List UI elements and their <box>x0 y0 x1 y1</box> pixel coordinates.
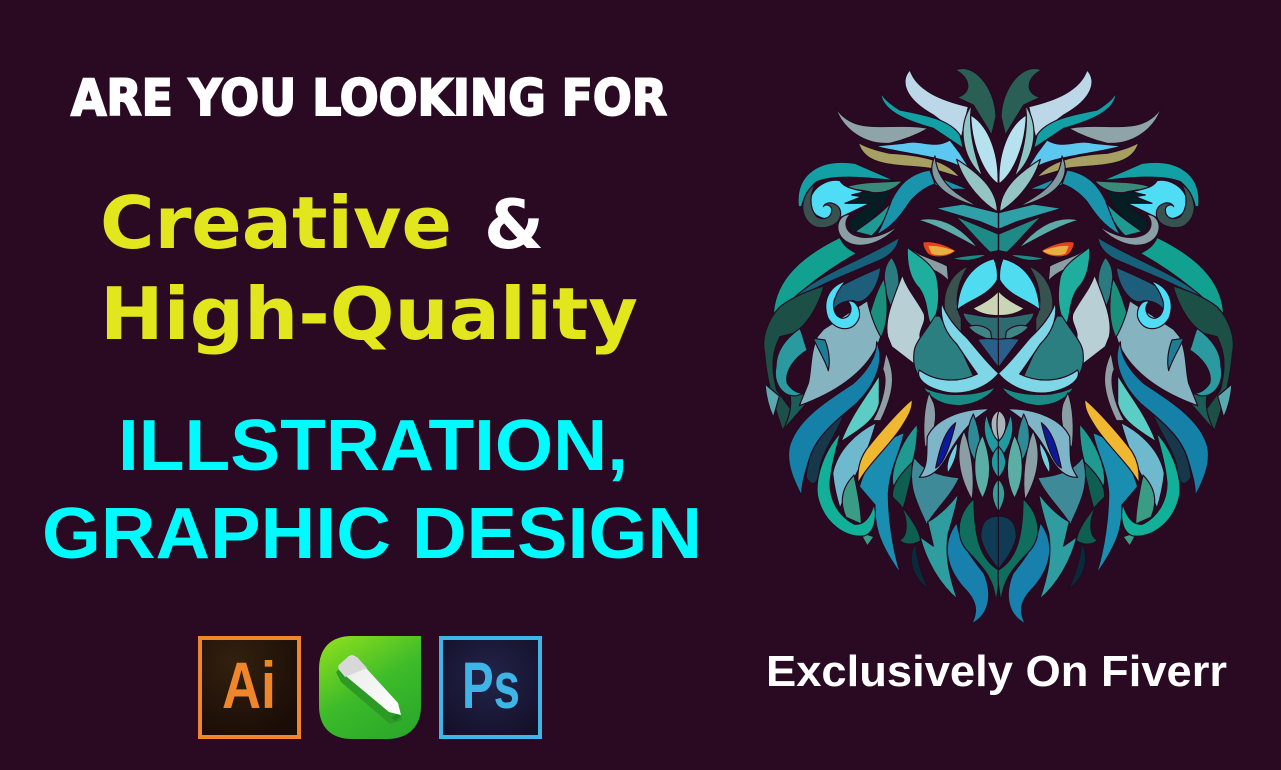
icon: adobe photoshop: Ps <box>462 648 520 722</box>
lion lower half <box>764 281 1000 624</box>
icon: coreldraw pen <box>319 636 421 739</box>
caption: exclusively on fiverr: Exclusively On Fiverr <box>766 647 1227 696</box>
lion left half <box>764 68 1000 624</box>
heading: are you looking for: ARE YOU LOOKING FOR <box>71 69 667 127</box>
heading: high-quality: High-Quality <box>100 272 638 356</box>
lion illustration <box>764 68 1233 624</box>
heading: creative: Creative <box>100 181 452 265</box>
icon: adobe illustrator: Ai <box>222 648 276 722</box>
lion right half (mirror) <box>997 68 1233 624</box>
icon: adobe illustrator <box>200 638 299 737</box>
heading: graphic design: GRAPHIC DESIGN <box>42 494 702 574</box>
heading: illstration: ILLSTRATION, <box>118 406 628 486</box>
icon: adobe photoshop <box>441 638 540 737</box>
ampersand: & <box>484 186 544 265</box>
